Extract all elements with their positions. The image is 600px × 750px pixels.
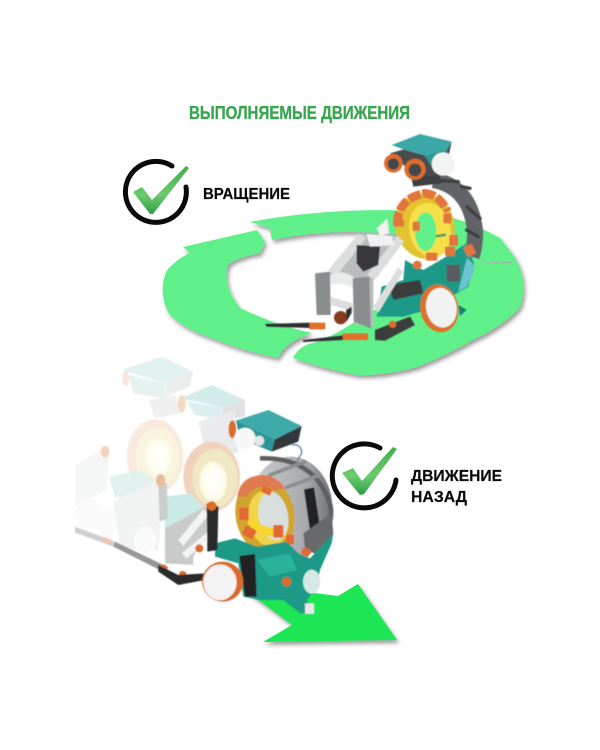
- orange joint: [282, 577, 291, 586]
- near neck: [198, 410, 238, 453]
- black post: [207, 503, 218, 552]
- wire: [292, 445, 302, 462]
- teal body: [377, 243, 474, 317]
- ghost robots faded: [75, 357, 245, 573]
- near head cap: [178, 395, 186, 413]
- near teal body: [163, 493, 205, 532]
- dark chassis: [388, 280, 423, 300]
- pale cap: [303, 570, 320, 594]
- far frame joint: [101, 446, 109, 458]
- grey disc: [249, 457, 332, 560]
- far head cap: [122, 370, 129, 386]
- near gear ring: [183, 442, 240, 512]
- dark base: [303, 513, 333, 557]
- head grille: [272, 426, 302, 452]
- head ball: [234, 428, 256, 449]
- near head top: [180, 385, 245, 407]
- body highlight: [257, 553, 297, 577]
- near post: [158, 482, 168, 522]
- head top: [236, 410, 302, 439]
- title: ВЫПОЛНЯЕМЫЕ ДВИЖЕНИЯ: [189, 103, 410, 123]
- eye right: [404, 159, 426, 180]
- arrow: backward: [245, 584, 397, 642]
- foot tip: [305, 603, 314, 614]
- label: backward movement: ДВИЖЕНИЕ: [411, 468, 502, 485]
- roller shaft: [346, 307, 352, 322]
- near head grille: [222, 400, 245, 422]
- fork left: [265, 323, 325, 329]
- arrow segment: top: [250, 210, 517, 263]
- robot: rotating: [265, 134, 480, 342]
- head front: [390, 142, 452, 177]
- head joint: [254, 436, 264, 446]
- arrow segment: left: [163, 230, 312, 358]
- near frame: [113, 482, 163, 550]
- lift arms: [328, 234, 404, 313]
- far gear ring: [127, 419, 183, 494]
- lift plates: [315, 272, 371, 328]
- neck: [410, 170, 442, 187]
- near head side: [187, 402, 222, 420]
- label: backward movement: [411, 468, 502, 506]
- roller: [334, 311, 347, 324]
- orange joints: [160, 501, 216, 579]
- icon: check mark rotation: [125, 161, 189, 222]
- rods: [270, 462, 320, 487]
- gripper: [158, 565, 205, 585]
- teal body: [215, 533, 333, 613]
- far frame: [75, 450, 108, 507]
- orange gear blocks: [394, 213, 476, 269]
- gear ring: [229, 471, 301, 559]
- eye left: [384, 154, 403, 173]
- near joint: [156, 474, 165, 487]
- dark block: [447, 265, 460, 282]
- orange gear blocks: [239, 486, 312, 557]
- far teal body: [108, 470, 158, 503]
- faded fork: [75, 527, 168, 573]
- head teal panel: [425, 149, 447, 165]
- gripper: [375, 317, 415, 341]
- wheel: [202, 562, 243, 602]
- robot: moving backward: [158, 410, 333, 614]
- frame arms: [178, 509, 213, 558]
- gear ring: [387, 185, 463, 267]
- disc rim: [260, 458, 331, 547]
- head side: [236, 421, 275, 452]
- fork right: [303, 333, 368, 342]
- white blocks: [367, 218, 394, 247]
- dark core: [357, 245, 380, 272]
- grey arc body: [433, 180, 480, 257]
- icon: check mark backward: [332, 444, 397, 508]
- far head grille: [165, 372, 193, 397]
- faded wheels: [76, 497, 156, 553]
- label: backward movement: НАЗАД: [411, 489, 468, 506]
- lift backing: [330, 235, 400, 327]
- arrow segment: bottom right: [293, 258, 523, 375]
- dark chassis: [239, 554, 257, 597]
- far neck: [148, 395, 180, 418]
- green circular arrows: [163, 210, 523, 375]
- frame panel: [165, 507, 210, 565]
- far head top: [122, 357, 193, 383]
- head top: [392, 134, 452, 156]
- label: rotation: ВРАЩЕНИЕ: [203, 186, 290, 203]
- teal tail: [458, 305, 467, 316]
- wheel: [416, 281, 462, 335]
- far head side: [128, 375, 165, 398]
- teal ball edge: [458, 258, 474, 292]
- head side ball: [432, 152, 455, 176]
- black sensor: [304, 487, 320, 531]
- orange cap: [229, 421, 236, 438]
